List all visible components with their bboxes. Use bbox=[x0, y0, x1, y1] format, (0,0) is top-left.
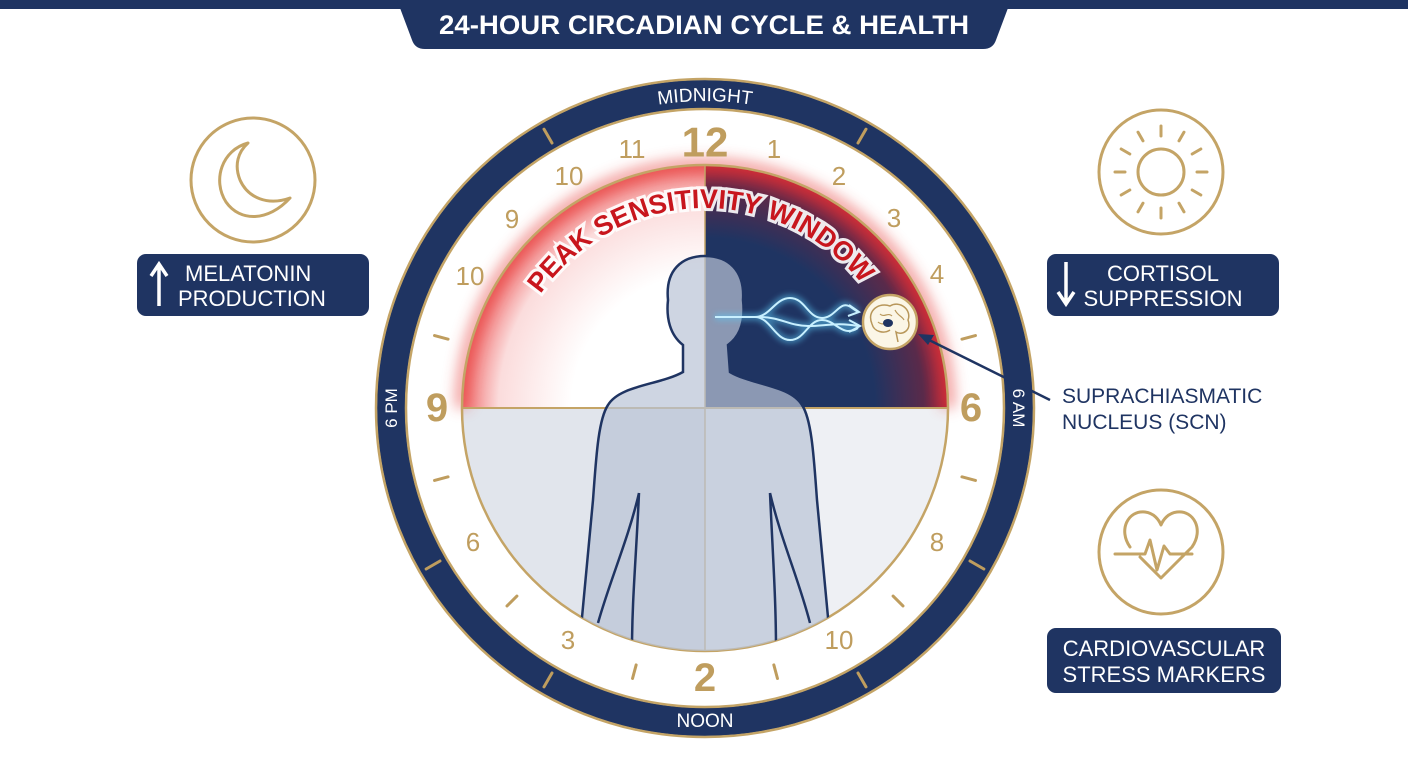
SCN label bbox=[1062, 385, 1262, 434]
hour numbers: 8 bbox=[930, 527, 944, 557]
clock dial bbox=[374, 78, 1036, 738]
hour numbers: 2 bbox=[832, 161, 846, 191]
icon: brain (SCN) bbox=[863, 295, 917, 349]
hour numbers: 6 bbox=[466, 527, 480, 557]
label box: MELATONIN bbox=[185, 261, 311, 286]
panel: cardiovascular bbox=[1047, 490, 1281, 693]
hour numbers: 12 bbox=[682, 118, 728, 166]
label box: CARDIOVASCULAR bbox=[1063, 636, 1265, 661]
label box bbox=[137, 254, 369, 316]
ring label: midnight: MIDNIGHT bbox=[658, 88, 754, 104]
light waves bbox=[715, 298, 860, 340]
label box: CORTISOL bbox=[1107, 261, 1219, 286]
quadrants bbox=[462, 165, 948, 651]
hour numbers bbox=[426, 118, 982, 700]
peak sensitivity label: PEAK SENSITIVITY WINDOW bbox=[526, 189, 876, 293]
label box: SUPPRESSION bbox=[1084, 286, 1242, 311]
title banner bbox=[0, 0, 1408, 49]
ring label: 6 AM: 6 AM bbox=[1009, 389, 1028, 427]
title banner: 24-HOUR CIRCADIAN CYCLE & HEALTH bbox=[439, 10, 969, 40]
arrow: SCN pointer bbox=[918, 334, 1050, 400]
ring label: noon: NOON bbox=[676, 711, 734, 732]
hour numbers: 3 bbox=[561, 625, 575, 655]
hour numbers: 10 bbox=[825, 625, 853, 655]
hour numbers: 4 bbox=[930, 259, 944, 289]
icon: heart with pulse bbox=[1099, 490, 1223, 614]
outer ring bbox=[376, 79, 1034, 737]
label box bbox=[1047, 254, 1279, 316]
human silhouette bbox=[578, 256, 832, 660]
icon: sun bbox=[1099, 110, 1223, 234]
hour numbers: 6 bbox=[960, 386, 982, 430]
hour numbers: 10 bbox=[555, 161, 583, 191]
peak sensitivity label: PEAK SENSITIVITY WINDOW bbox=[522, 186, 881, 296]
label box bbox=[1047, 628, 1281, 693]
SCN label: NUCLEUS (SCN) bbox=[1062, 411, 1227, 434]
panel: cortisol bbox=[1047, 110, 1279, 316]
icon: moon bbox=[191, 118, 315, 242]
hour numbers: 11 bbox=[618, 134, 646, 164]
hour numbers: 1 bbox=[767, 134, 781, 164]
tick marks bbox=[426, 129, 984, 687]
hour numbers: 9 bbox=[426, 386, 448, 430]
label box: STRESS MARKERS bbox=[1063, 662, 1265, 687]
hour numbers: 3 bbox=[887, 203, 901, 233]
panel: melatonin bbox=[137, 118, 369, 316]
hour numbers: 10 bbox=[456, 261, 484, 291]
hour numbers: 2 bbox=[694, 656, 716, 700]
hour numbers: 9 bbox=[505, 204, 519, 234]
ring label: 6 PM: 6 PM bbox=[382, 388, 401, 428]
label box: PRODUCTION bbox=[178, 286, 326, 311]
SCN label: SUPRACHIASMATIC bbox=[1062, 385, 1262, 408]
